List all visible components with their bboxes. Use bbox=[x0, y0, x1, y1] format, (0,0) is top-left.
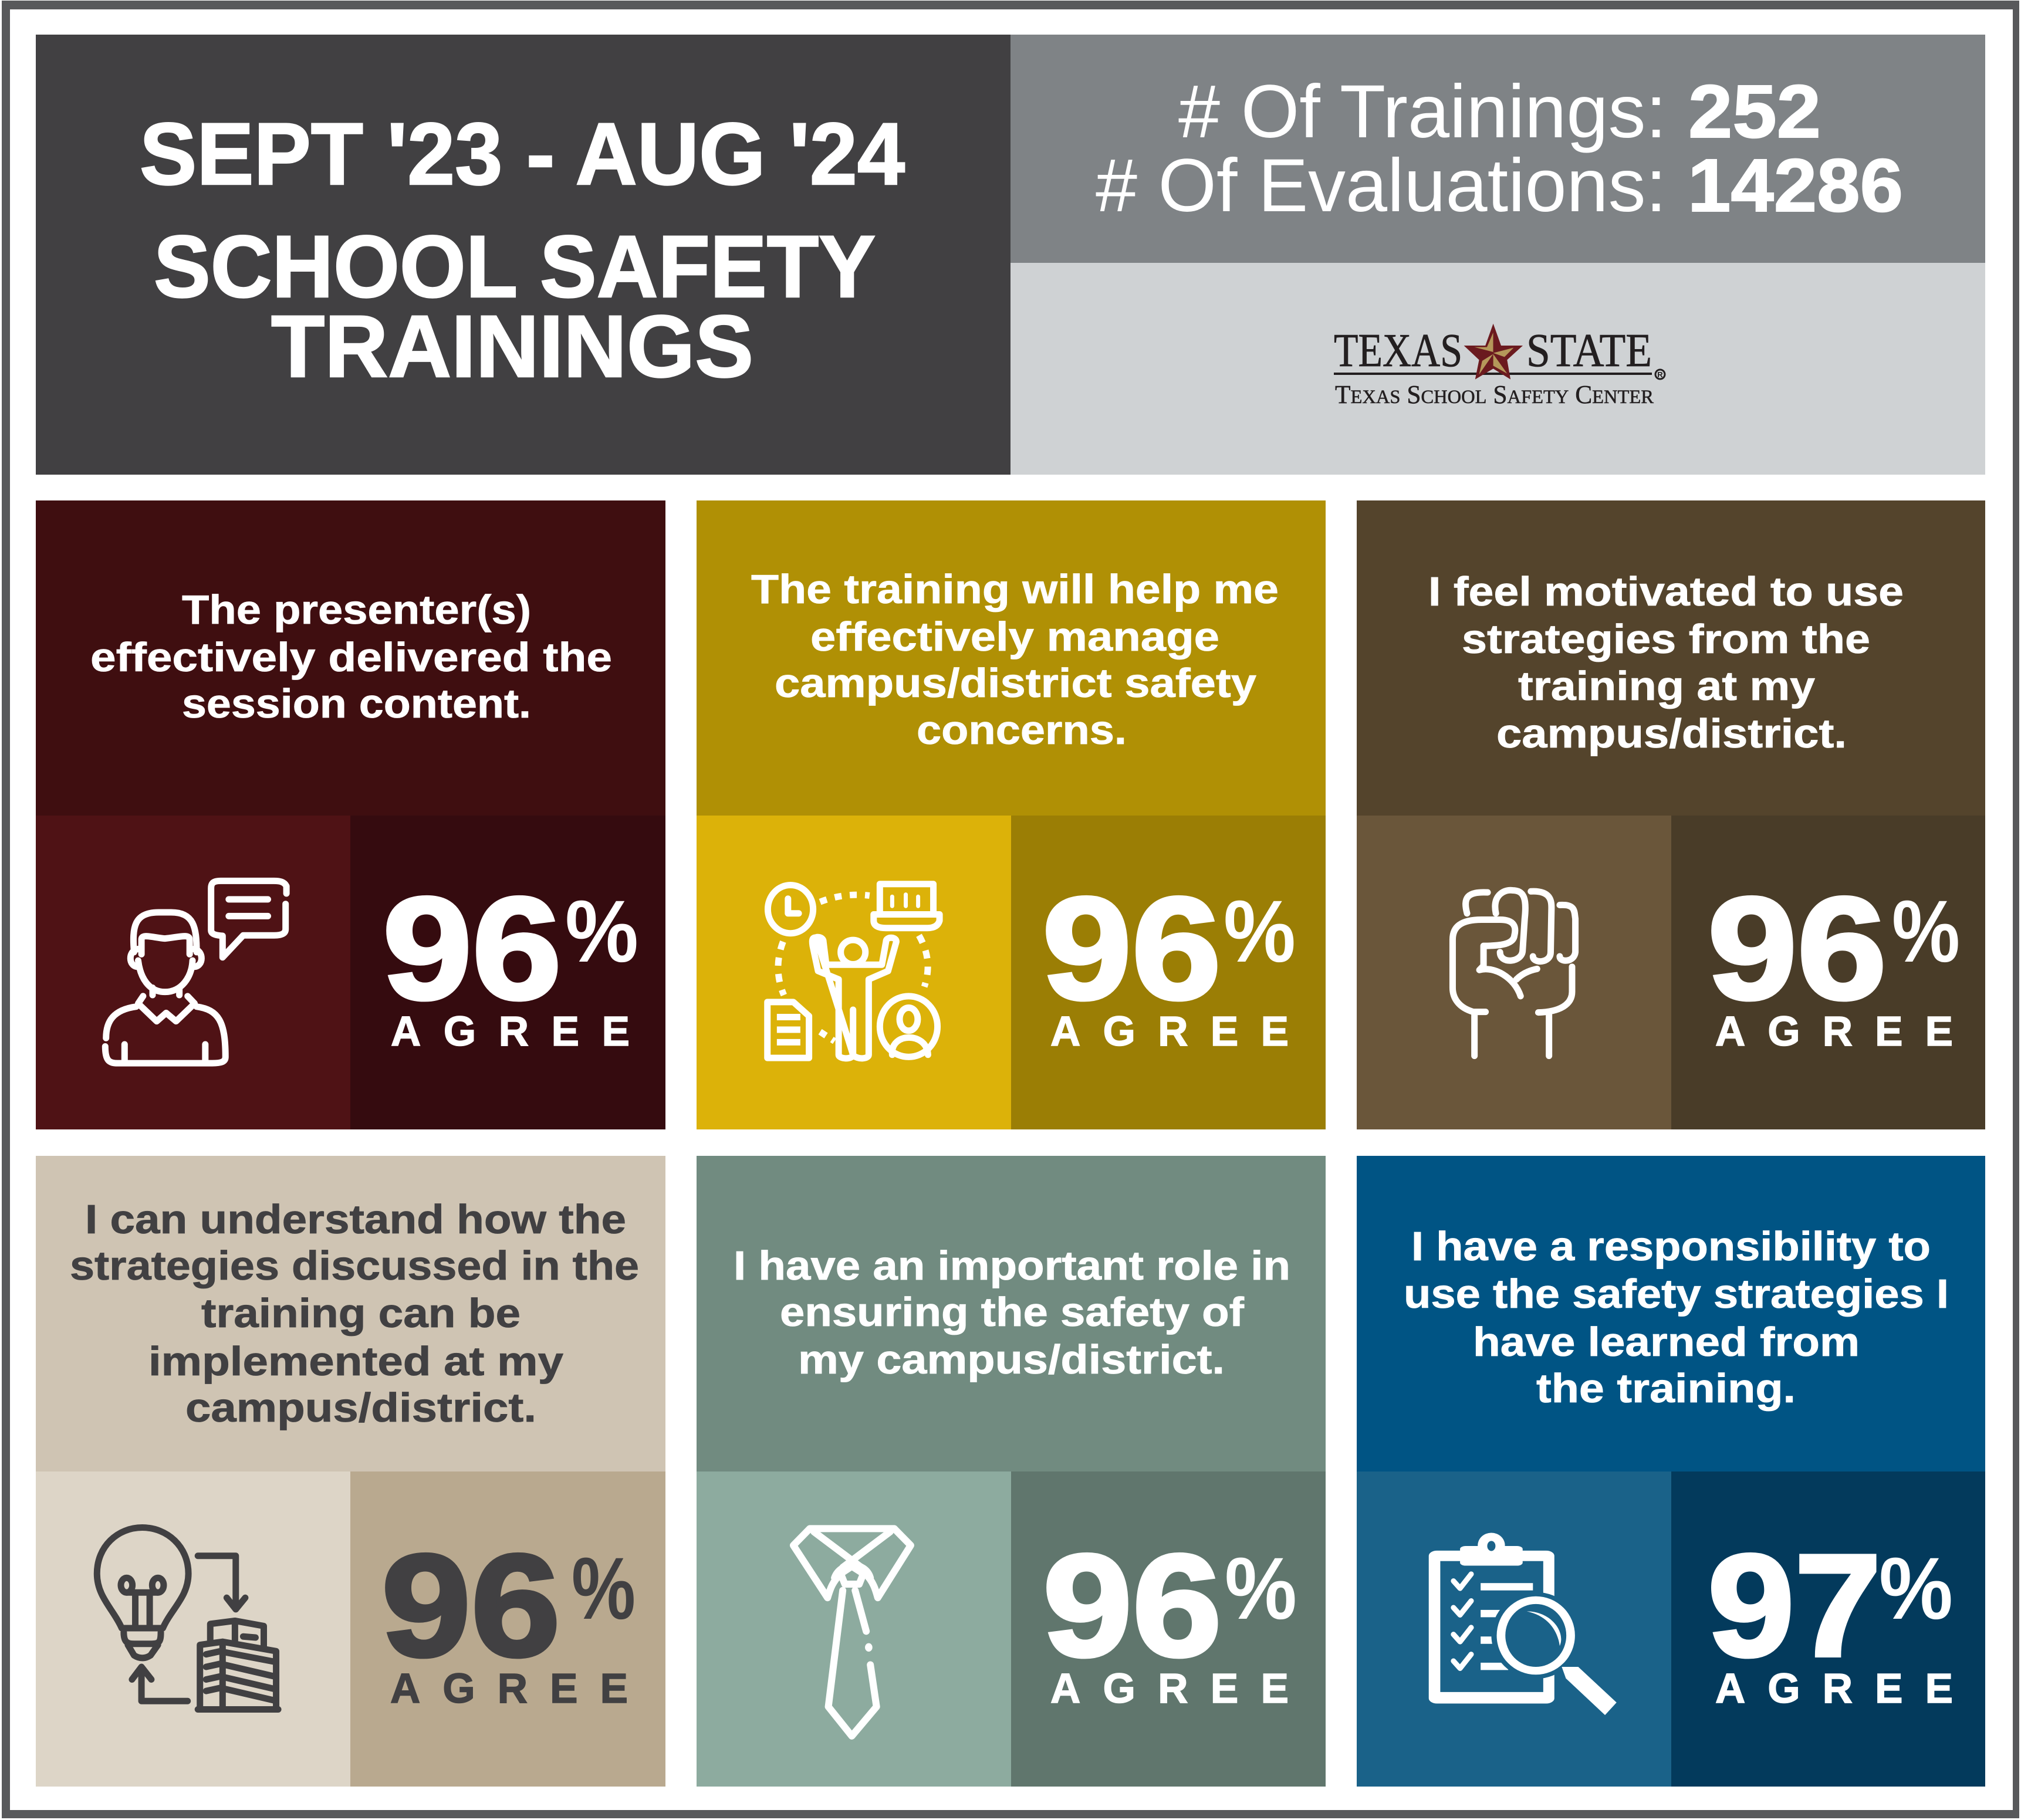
stat: 96 percent agree: % bbox=[1892, 882, 1960, 980]
stat: 96 percent agree: AGREE bbox=[1050, 1009, 1289, 1055]
stat: 96 percent agree bbox=[383, 867, 638, 1055]
stat: number of trainings: 252 bbox=[1688, 70, 1821, 154]
heading: trainings: TRAININGS bbox=[271, 297, 753, 395]
stat: 96 percent agree: 96 bbox=[1043, 1524, 1222, 1687]
registered mark: R bbox=[1657, 370, 1663, 379]
question text: concerns. bbox=[917, 707, 1127, 753]
heading: school safety: SCHOOL SAFETY bbox=[154, 217, 876, 316]
question text: I feel motivated to use bbox=[1428, 569, 1904, 614]
panel: responsibility bbox=[1357, 1156, 1985, 1787]
question text: I have an important role in bbox=[734, 1243, 1290, 1288]
question text bbox=[1404, 1223, 1949, 1411]
question text bbox=[734, 1243, 1290, 1382]
question text: use the safety strategies I bbox=[1404, 1271, 1949, 1317]
question text bbox=[70, 1196, 639, 1430]
question text: ensuring the safety of bbox=[780, 1289, 1245, 1335]
question text: I have a responsibility to bbox=[1411, 1223, 1931, 1269]
stat: 97 percent agree: AGREE bbox=[1715, 1666, 1953, 1712]
stat: number of evaluations: 14286 bbox=[1688, 144, 1903, 228]
logo: Texas State: TEXAS SCHOOL SAFETY CENTER bbox=[1335, 380, 1654, 409]
panel: presenter bbox=[36, 500, 665, 1129]
stat: 96 percent agree: AGREE bbox=[390, 1666, 628, 1712]
icon: speaker with speech bubble bbox=[105, 881, 286, 1063]
question text: implemented at my bbox=[148, 1338, 563, 1384]
panel: motivation bbox=[1357, 500, 1985, 1129]
stat: 96 percent agree: % bbox=[1224, 882, 1296, 980]
stat: 97 percent agree bbox=[1708, 1524, 1953, 1712]
stat: 96 percent agree bbox=[1708, 867, 1960, 1055]
question text: campus/district safety bbox=[775, 660, 1256, 706]
registered mark bbox=[1655, 370, 1665, 379]
panel: training counts bbox=[1010, 35, 1985, 263]
question text: I can understand how the bbox=[85, 1196, 626, 1242]
panel: important role bbox=[697, 1156, 1326, 1787]
stat: number of evaluations: # Of Evaluations: bbox=[1096, 144, 1667, 228]
stat: 96 percent agree: AGREE bbox=[1715, 1009, 1953, 1055]
question text: The presenter(s) bbox=[182, 587, 531, 632]
question text: the training. bbox=[1536, 1365, 1796, 1411]
stat: 96 percent agree: % bbox=[572, 1539, 636, 1638]
icon: clipboard and magnifying glass bbox=[1429, 1533, 1617, 1715]
icon: star bbox=[1464, 324, 1523, 380]
stat: 97 percent agree: % bbox=[1879, 1539, 1953, 1638]
panel: title bbox=[36, 35, 1010, 475]
question text: have learned from bbox=[1473, 1319, 1860, 1365]
panel: implementation bbox=[36, 1156, 665, 1787]
panel: manage safety bbox=[697, 500, 1326, 1129]
stat: 97 percent agree: 97 bbox=[1708, 1524, 1881, 1687]
stat: 96 percent agree: AGREE bbox=[1050, 1666, 1289, 1712]
question text: effectively delivered the bbox=[90, 634, 612, 680]
question text: The training will help me bbox=[751, 566, 1279, 612]
stat: 96 percent agree: % bbox=[565, 882, 638, 980]
question text: strategies from the bbox=[1462, 616, 1870, 662]
logo: Texas State bbox=[1334, 324, 1665, 409]
stat: 96 percent agree: 96 bbox=[1708, 867, 1887, 1030]
question text: strategies discussed in the bbox=[70, 1243, 639, 1288]
stat: 96 percent agree: 96 bbox=[1042, 867, 1221, 1030]
logo: Texas State: TEXAS bbox=[1334, 325, 1462, 377]
question text: session content. bbox=[182, 681, 531, 726]
question text: effectively manage bbox=[810, 614, 1219, 659]
heading: date range: SEPT '23 - AUG '24 bbox=[140, 104, 905, 203]
question text: training can be bbox=[201, 1290, 521, 1336]
question text: training at my bbox=[1518, 663, 1815, 709]
icon: raised fist bbox=[1452, 890, 1576, 1056]
question text bbox=[751, 566, 1279, 753]
question text bbox=[90, 587, 612, 726]
icon: person managing tasks bbox=[768, 884, 939, 1058]
question text: my campus/district. bbox=[798, 1337, 1225, 1382]
icon: collar and necktie bbox=[793, 1528, 911, 1736]
question text: campus/district. bbox=[1496, 711, 1847, 756]
stat: number of trainings: # Of Trainings: bbox=[1178, 70, 1667, 154]
question text: campus/district. bbox=[185, 1385, 536, 1430]
stat: 96 percent agree: 96 bbox=[383, 867, 562, 1030]
icon: light bulb and building bbox=[97, 1528, 278, 1710]
stat: 96 percent agree bbox=[381, 1524, 636, 1712]
stat: 96 percent agree bbox=[1043, 1524, 1297, 1712]
stat: 96 percent agree: 96 bbox=[381, 1524, 560, 1687]
stat: 96 percent agree: % bbox=[1225, 1539, 1297, 1638]
panel: logo bbox=[1010, 263, 1985, 475]
stat: 96 percent agree: AGREE bbox=[391, 1009, 630, 1055]
logo: Texas State: STATE bbox=[1526, 325, 1652, 377]
stat: 96 percent agree bbox=[1042, 867, 1296, 1055]
question text bbox=[1428, 569, 1904, 756]
